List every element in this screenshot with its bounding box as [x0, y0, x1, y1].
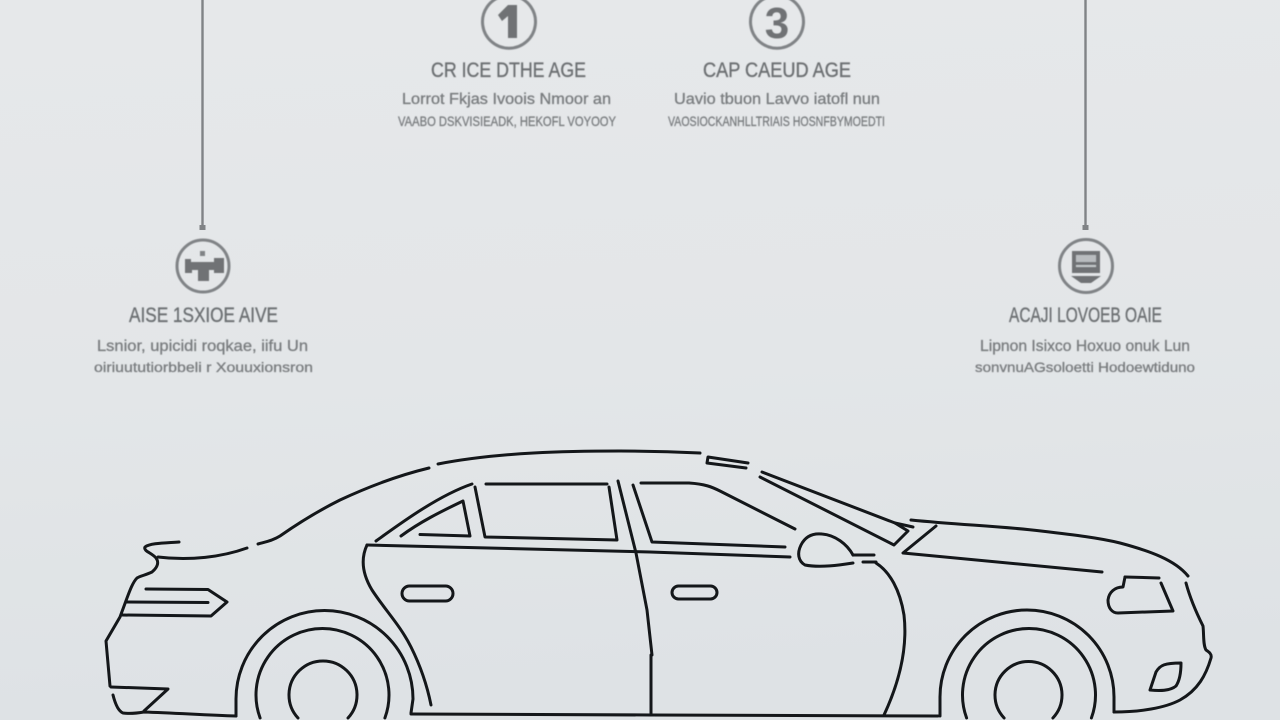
car: side mirror	[799, 534, 853, 566]
car: b-pillar	[618, 481, 652, 655]
car: headlight	[1125, 577, 1159, 578]
car: front hub	[995, 662, 1062, 718]
car: fog light	[1150, 663, 1181, 691]
icon: number 1	[483, 0, 536, 48]
icon: number 3: 3	[765, 0, 789, 48]
car: rear bumper notch	[111, 687, 168, 711]
icon: tool	[177, 240, 229, 292]
heading: right item: ACAJI LOVOEB OAIE	[1009, 304, 1162, 327]
text: step 3 line 1: Uavio tbuon Lavvo iatofl nun	[674, 91, 880, 108]
car: rear wheel arch	[236, 611, 413, 716]
car: rear quarter panel	[363, 545, 431, 705]
car: trunk and rear outline	[106, 542, 179, 686]
car: front nose	[1114, 583, 1211, 712]
icon: number 3	[750, 0, 804, 48]
car: front wheel arch	[940, 610, 1114, 716]
car line drawing	[106, 451, 1211, 718]
text: right item line 1: Lipnon Isixco Hoxuo onuk Lun	[980, 338, 1190, 355]
car: front door edge	[876, 563, 905, 715]
car: rear door window	[486, 482, 607, 486]
text: step 1 line 1: Lorrot Fkjas Ivoois Nmoor an	[402, 91, 611, 108]
text: left item line 1: Lsnior, upicidi roqkae, iifu Un	[97, 338, 308, 355]
car: rear quarter window	[376, 484, 472, 541]
car: rear hub	[289, 661, 357, 718]
right connector arrow	[1082, 0, 1088, 230]
callout: step 3	[668, 0, 885, 129]
heading: left item: AISE 1SXIOE AIVE	[129, 304, 278, 327]
car: trunk lid curve	[158, 548, 247, 559]
text: left item line 2: oiriuututiorbbeli r Xouuxionsron	[94, 359, 313, 375]
car: belt line	[367, 545, 790, 557]
text: right item line 2: sonvnuAGsoloetti Hodoewtiduno	[975, 359, 1195, 375]
heading: step 3: CAP CAEUD AGE	[703, 59, 851, 82]
callout: left item	[94, 240, 313, 375]
car: hood	[911, 520, 1188, 576]
car: front door window	[633, 485, 785, 547]
car: roof line	[258, 468, 429, 544]
text: step 1 line 2: VAABO DSKVISIEADK, HEKOFL VOYOOY	[398, 113, 617, 129]
heading: step 1: CR ICE DTHE AGE	[431, 59, 586, 82]
car: sill line	[411, 714, 938, 716]
car: tail light	[122, 589, 227, 616]
car: rear tyre	[256, 629, 389, 718]
callout: right item	[975, 240, 1195, 375]
text: step 3 line 2: VAOSIOCKANHLLTRIAIS HOSNFBYMOEDTI	[668, 113, 885, 129]
car: windshield	[762, 472, 913, 527]
left connector arrow	[200, 0, 206, 230]
car: roof fragment	[707, 457, 748, 468]
callout: step 1	[398, 0, 617, 129]
car: rear door handle	[402, 586, 453, 601]
car: front door handle	[672, 586, 717, 599]
car: front tyre	[962, 629, 1096, 718]
icon: document badge	[1060, 240, 1112, 292]
